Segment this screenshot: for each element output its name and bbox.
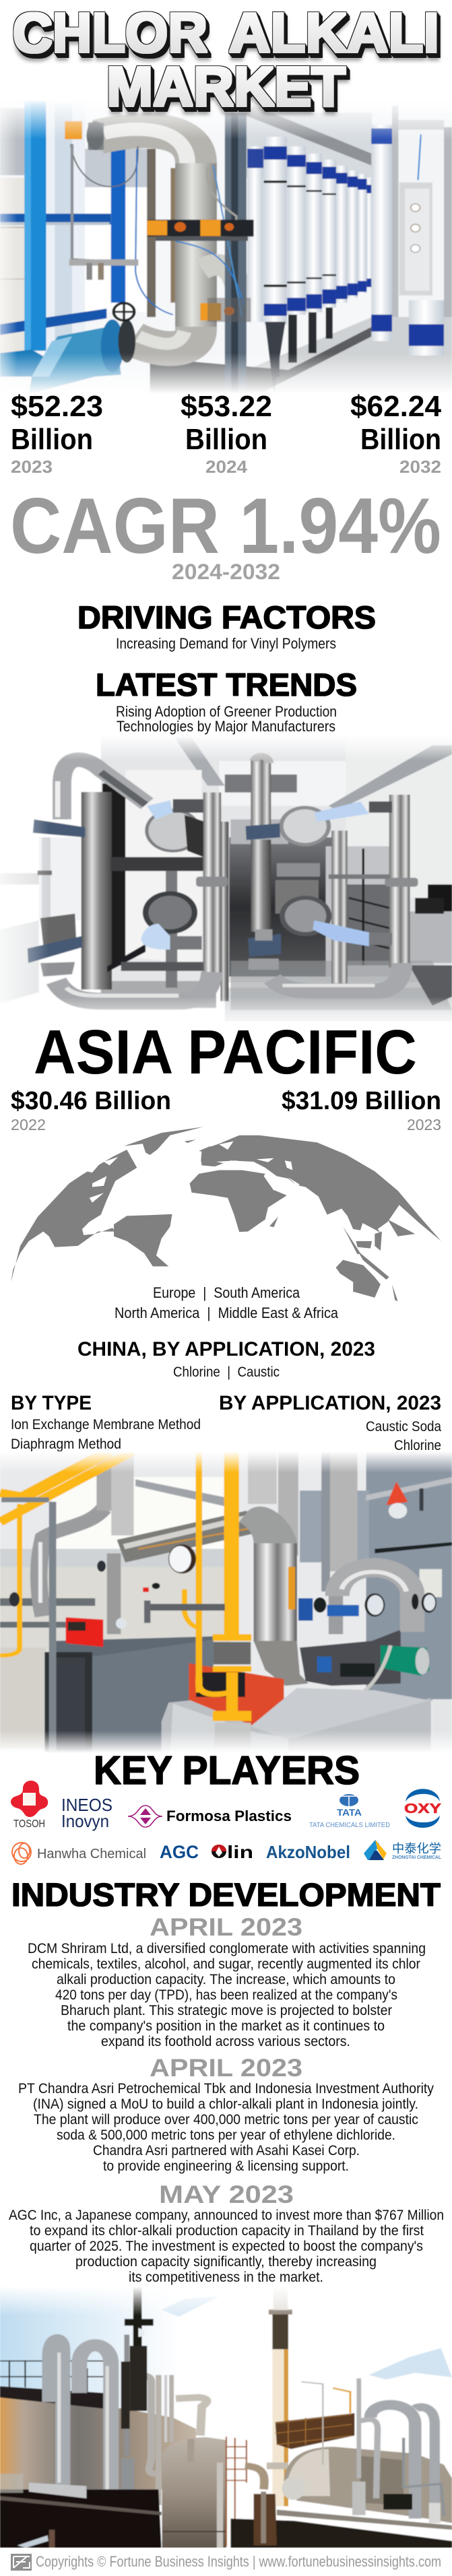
logo: Tosoh	[11, 1781, 48, 1830]
logo: OXY: OXY	[404, 1802, 442, 1816]
red boxes	[66, 1617, 284, 1731]
regional values	[11, 1087, 441, 1133]
stat 2024: Billion	[185, 423, 267, 456]
stat 2032: Billion	[360, 423, 441, 456]
stat 2032	[350, 390, 442, 477]
development: april 2023 DCM Shriram: the company's position in the market as it continues to	[67, 2018, 385, 2034]
logo: Olin: lin	[227, 1842, 253, 1862]
pressure gauges	[9, 1482, 437, 1628]
logo: Zhongtai Chemical	[364, 1840, 442, 1860]
value 2022: $30.46 Billion	[11, 1087, 171, 1115]
panel: by application: Caustic Soda	[366, 1419, 441, 1434]
tubes	[71, 135, 421, 317]
photo: stainless steel process piping	[1, 738, 452, 1021]
value 2023: 2023	[407, 1116, 441, 1133]
clear hoses	[141, 799, 392, 950]
development: may 2023 AGC: quarter of 2025. The investment is expected to boost the company's	[30, 2239, 423, 2254]
u-bend pipes	[56, 963, 402, 1001]
development: april 2023 DCM Shriram: expand its foothold across various sectors.	[101, 2034, 350, 2049]
logo: Tosoh: TOSOH	[13, 1818, 45, 1830]
gauge panel	[399, 183, 432, 296]
stat 2032: 2032	[399, 457, 441, 477]
right horizontal vessel	[276, 2413, 452, 2523]
market size stats	[11, 390, 442, 477]
photo: refinery at sunset	[0, 2287, 452, 2548]
big steel pipe	[98, 129, 239, 349]
vertical steel pipes	[196, 756, 418, 1001]
panel: by type: BY TYPE	[11, 1392, 92, 1414]
left ground deck	[0, 2489, 162, 2548]
logo: Formosa Plastics	[128, 1806, 292, 1827]
heading: driving factors: DRIVING FACTORS	[77, 599, 376, 635]
tank end flanges	[143, 806, 331, 936]
pump set	[300, 1630, 430, 1700]
key player logos	[11, 1781, 442, 1864]
development: april 2023 DCM Shriram: DCM Shriram Ltd, a diversified conglomerate with activities spanning	[28, 1941, 426, 1956]
development: april 2023 DCM Shriram: alkali production capacity. The increase, which amounts to	[57, 1972, 395, 1987]
rotameter	[28, 760, 147, 977]
stat 2024: 2024	[205, 457, 248, 477]
chimney stack	[267, 2286, 292, 2506]
other regions list	[115, 1284, 339, 1321]
panel: by application: Chlorine	[394, 1438, 441, 1453]
logo: Ineos Inovyn: Inovyn	[61, 1811, 109, 1831]
logo: Zhongtai Chemical: 中泰化学	[392, 1842, 441, 1855]
logo: Olin	[212, 1842, 253, 1862]
title: CHLOR	[13, 1, 207, 64]
stat 2024	[181, 390, 272, 477]
development: may 2023 AGC	[9, 2181, 444, 2285]
stat 2024: $53.22	[181, 390, 272, 423]
stat 2032: $62.24	[350, 390, 442, 423]
stat 2023	[11, 390, 103, 477]
right arch pipes	[301, 2379, 444, 2519]
heading: latest trends: LATEST TRENDS	[96, 667, 357, 702]
photo: boiler room with yellow gas pipes	[0, 1451, 452, 1752]
panel: by application: BY APPLICATION, 2023	[219, 1392, 441, 1414]
development: april 2023 DCM Shriram: chemicals, textiles, alcohol, and sugar, recently augmented its chlor	[32, 1956, 420, 1972]
development: april 2023 Chandra Asri: soda & 500,000 metric tons per year of ethylene dichloride.	[57, 2127, 395, 2143]
grey boiler cabinet	[44, 1637, 214, 1753]
development: april 2023 Chandra Asri: The plant will produce over 400,000 metric tons per year of caustic	[34, 2112, 418, 2127]
development: april 2023 Chandra Asri: Chandra Asri partnered with Asahi Kasei Corp.	[93, 2143, 360, 2158]
development: april 2023 DCM Shriram: APRIL 2023	[150, 1913, 302, 1941]
steel frame	[82, 783, 214, 989]
deck rails	[0, 2474, 162, 2548]
logo: OXY	[404, 1789, 442, 1828]
left horizontal vessel	[0, 2360, 196, 2489]
logo: AGC: AGC	[160, 1842, 199, 1862]
development: may 2023 AGC: its competitiveness in the market.	[129, 2270, 323, 2285]
photo: chlor-alkali membrane plant	[0, 101, 452, 392]
development: april 2023 DCM Shriram: 420 tons per day (TPD), has been realized at the company's	[55, 1987, 397, 2003]
logo: Hanwha Chemical: Hanwha Chemical	[37, 1847, 146, 1861]
development: april 2023 Chandra Asri: (INA) signed a MoU to build a chlor-alkali plant in Indonesia jointly.	[33, 2096, 418, 2112]
logo: Ineos Inovyn	[61, 1795, 112, 1831]
process clutter	[225, 774, 452, 1010]
panel: by type	[11, 1392, 201, 1452]
centre column	[246, 824, 281, 970]
membrane columns	[247, 125, 444, 394]
central vertical vessel	[162, 2437, 264, 2548]
logo: Tata Chemicals: TATA	[337, 1807, 362, 1818]
panel: by type: Diaphragm Method	[11, 1436, 121, 1452]
development: may 2023 AGC: production capacity significantly, thereby increasing	[75, 2254, 377, 2270]
icon: Fortune Business Insights logo	[11, 2554, 32, 2571]
logo: AkzoNobel: AkzoNobel	[266, 1842, 350, 1862]
development: april 2023 DCM Shriram: Bharuch plant. This strategic move is projected to bolster	[61, 2003, 392, 2018]
yellow pipes	[0, 1451, 251, 1717]
panel: by type: Ion Exchange Membrane Method	[11, 1417, 201, 1432]
upper steel pipes	[39, 1451, 343, 1634]
dark vertical pipe	[225, 112, 247, 394]
other regions list: North America | Middle East & Africa	[115, 1304, 339, 1321]
development: may 2023 AGC: MAY 2023	[159, 2181, 294, 2208]
right lower deck	[230, 2519, 452, 2548]
development: may 2023 AGC: to expand its chlor-alkali production capacity in Thailand by the first	[30, 2223, 424, 2239]
development: april 2023 Chandra Asri: APRIL 2023	[150, 2054, 302, 2082]
world map	[11, 1127, 441, 1301]
heading: key players: KEY PLAYERS	[94, 1748, 360, 1793]
CAGR period: 2024-2032	[172, 560, 280, 584]
flange, blue elbow and handwheel	[29, 121, 135, 394]
heading: industry development: INDUSTRY DEVELOPMENT	[11, 1878, 441, 1913]
development: april 2023 DCM Shriram	[28, 1913, 426, 2049]
left arch pipes	[50, 2335, 207, 2505]
development: april 2023 Chandra Asri: to provide engineering & licensing support.	[103, 2158, 349, 2174]
concrete pads	[162, 1688, 431, 1753]
right piping rails	[254, 2492, 452, 2546]
latest trends text: Rising Adoption of Greener Production	[116, 703, 337, 720]
blue pipe and beams	[0, 101, 125, 376]
value 2023: $31.09 Billion	[282, 1087, 441, 1115]
heading: china by application: CHINA, BY APPLICATION, 2023	[77, 1338, 375, 1360]
title: ALKALI	[229, 1, 439, 64]
logo: Ineos Inovyn: INEOS	[61, 1795, 112, 1815]
latest trends text	[116, 703, 337, 735]
driving factor text: Increasing Demand for Vinyl Polymers	[116, 635, 336, 652]
heading: asia pacific: ASIA PACIFIC	[34, 1017, 417, 1087]
stat 2023: $52.23	[11, 390, 103, 423]
development: april 2023 Chandra Asri	[18, 2054, 434, 2174]
title	[13, 1, 439, 118]
stat 2023: 2023	[11, 457, 53, 477]
other regions list: Europe | South America	[153, 1284, 300, 1301]
value 2022: 2022	[11, 1116, 46, 1133]
value 2023	[282, 1087, 441, 1133]
orange actuators	[65, 121, 254, 322]
title: MARKET	[106, 55, 346, 118]
flare tower	[121, 2286, 154, 2496]
central elbow pipe	[239, 1507, 309, 1686]
logo: Tata Chemicals	[309, 1794, 390, 1829]
arch pipe	[298, 1568, 412, 1634]
value 2022	[11, 1087, 171, 1133]
logo: Formosa Plastics: Formosa Plastics	[166, 1808, 292, 1824]
stat 2023: Billion	[11, 423, 93, 456]
logo: Tata Chemicals: TATA CHEMICALS LIMITED	[309, 1822, 390, 1829]
china segments: Chlorine | Caustic	[173, 1364, 280, 1380]
logo: Hanwha Chemical	[12, 1843, 146, 1864]
logo: Zhongtai Chemical: ZHONGTAI CHEMICAL	[392, 1855, 442, 1860]
panel: by application	[219, 1392, 441, 1453]
latest trends text: Technologies by Major Manufacturers	[117, 718, 335, 735]
